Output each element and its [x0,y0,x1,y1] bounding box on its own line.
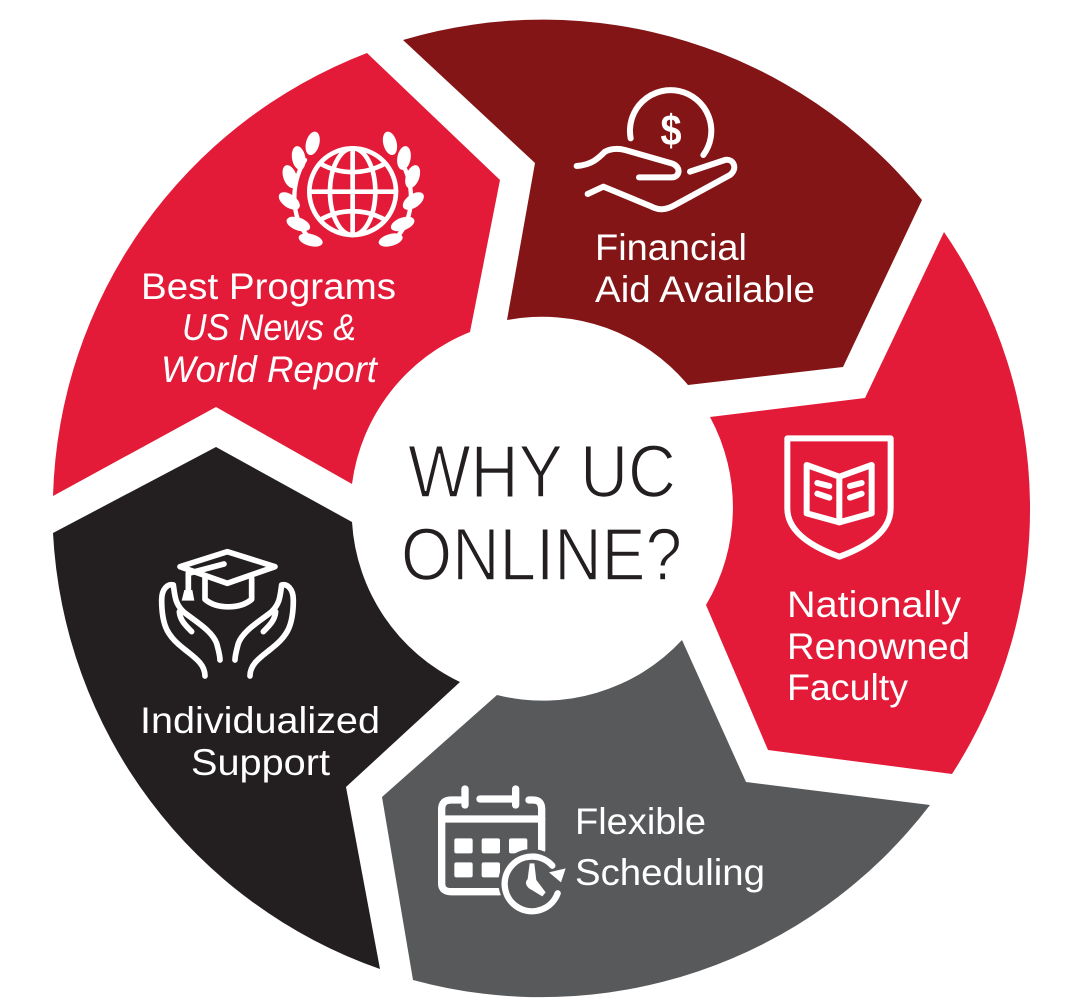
text: individualized support: Individualized [140,700,380,741]
center title: WHY UC [408,430,676,513]
text: best programs [141,266,396,390]
icon: hand with coin: $ [660,106,682,155]
panel: flexible scheduling [382,640,930,997]
icon: globe with laurel [276,130,427,249]
icon: graduation cap in hands [162,552,293,676]
text: financial aid [595,227,815,310]
panel: financial aid [403,20,922,385]
panel: individualized support [53,447,460,969]
panel: best programs [53,53,500,496]
text: renowned faculty [787,584,970,708]
text: renowned faculty: Faculty [787,667,908,708]
text: best programs: US News & [182,307,356,348]
text: financial aid: Financial [595,227,747,268]
icon: hand with coin [577,90,734,209]
text: best programs: World Report [161,349,379,390]
text: renowned faculty: Renowned [787,626,970,667]
icon: shield with book [787,438,891,557]
text: financial aid: Aid Available [595,269,815,310]
panel: renowned faculty [706,232,1030,774]
text: individualized support: Support [191,742,331,783]
text: flexible scheduling: Scheduling [575,852,765,893]
text: renowned faculty: Nationally [787,584,962,625]
icon: calendar with clock [442,789,566,916]
text: individualized support [140,700,380,783]
text: best programs: Best Programs [141,266,396,307]
text: flexible scheduling [575,801,765,893]
text: flexible scheduling: Flexible [575,801,706,842]
center title: ONLINE? [401,513,682,596]
center title [401,430,682,596]
